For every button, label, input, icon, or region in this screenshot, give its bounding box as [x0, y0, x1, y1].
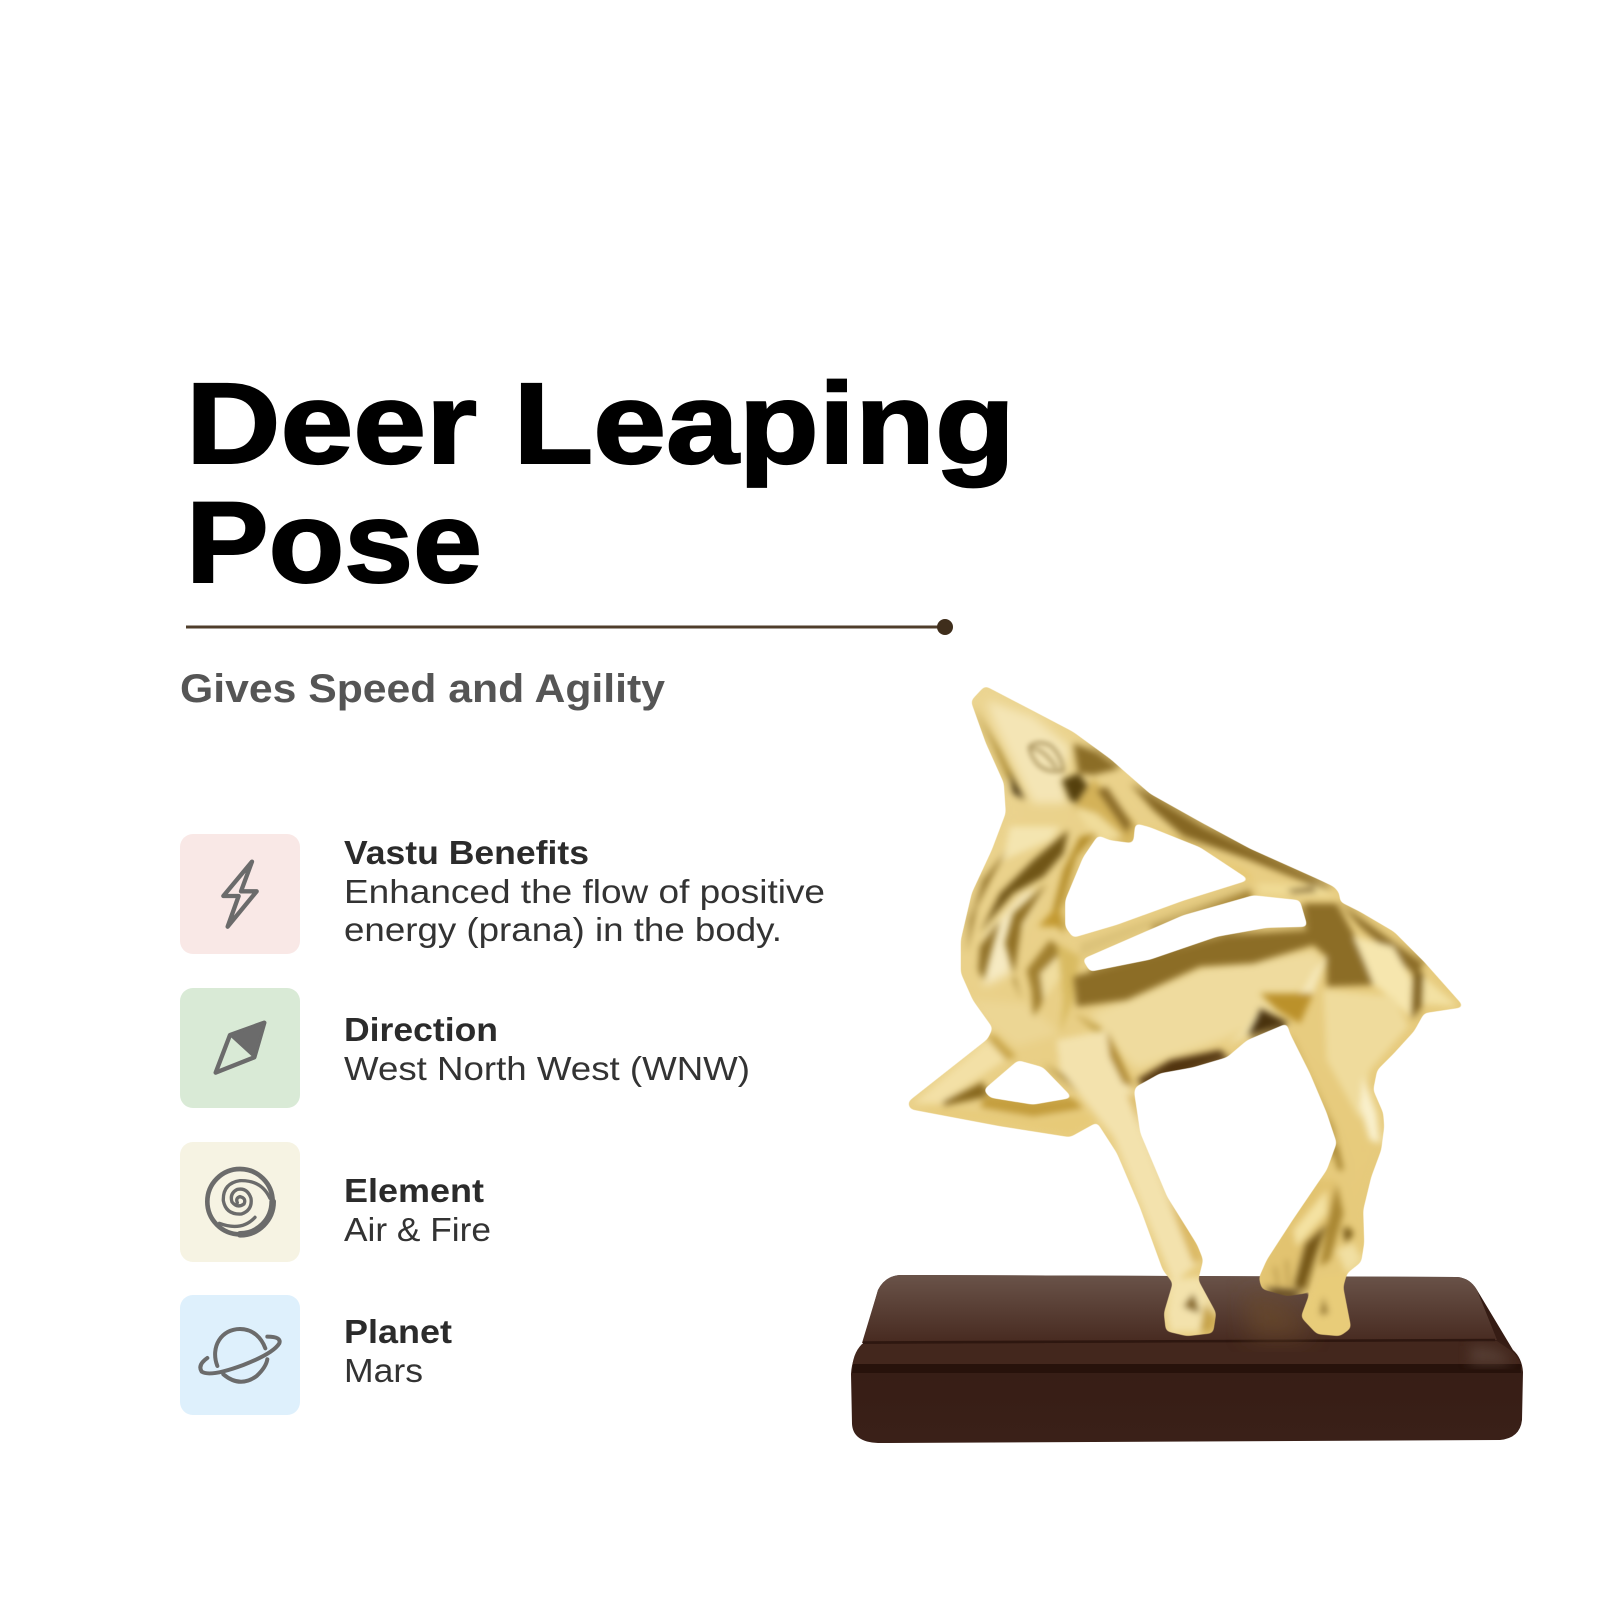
text: element: Element	[344, 1172, 484, 1209]
text: vastu benefits: Enhanced the flow of positive	[344, 873, 825, 910]
panel: element	[180, 1142, 491, 1262]
subtitle: Gives Speed and Agility	[180, 667, 666, 711]
text: planet: Mars	[344, 1352, 423, 1389]
text: vastu benefits	[344, 834, 825, 948]
text: element: Air & Fire	[344, 1211, 491, 1248]
text: vastu benefits: Vastu Benefits	[344, 834, 589, 871]
title	[186, 360, 1015, 607]
head and neck shading	[967, 700, 1337, 1080]
body and hind shading	[1073, 903, 1458, 1242]
divider with dot	[186, 619, 953, 635]
title: Pose	[186, 479, 482, 607]
deer eye	[1029, 743, 1063, 771]
text: element	[344, 1172, 491, 1248]
rear hooves shading	[1260, 1180, 1362, 1335]
text: planet	[344, 1313, 452, 1389]
panel: direction	[180, 988, 750, 1108]
panel: planet	[180, 1295, 452, 1415]
icon tile: lightning	[180, 834, 300, 954]
wooden base	[851, 1275, 1523, 1443]
text: direction	[344, 1011, 750, 1087]
icon tile: compass	[180, 988, 300, 1108]
text: direction: Direction	[344, 1011, 498, 1048]
icon tile: planet	[180, 1295, 300, 1415]
icon tile: spiral	[180, 1142, 300, 1262]
text: planet: Planet	[344, 1313, 452, 1350]
product illustration: brass deer on wooden base	[851, 680, 1523, 1443]
raised foreleg and front leg shading	[913, 1030, 1215, 1332]
text: direction: West North West (WNW)	[344, 1050, 750, 1087]
title: Deer Leaping	[186, 360, 1015, 488]
panel: vastu benefits	[180, 834, 825, 954]
brass deer figure	[900, 680, 1470, 1350]
text: vastu benefits: energy (prana) in the body.	[344, 911, 782, 948]
